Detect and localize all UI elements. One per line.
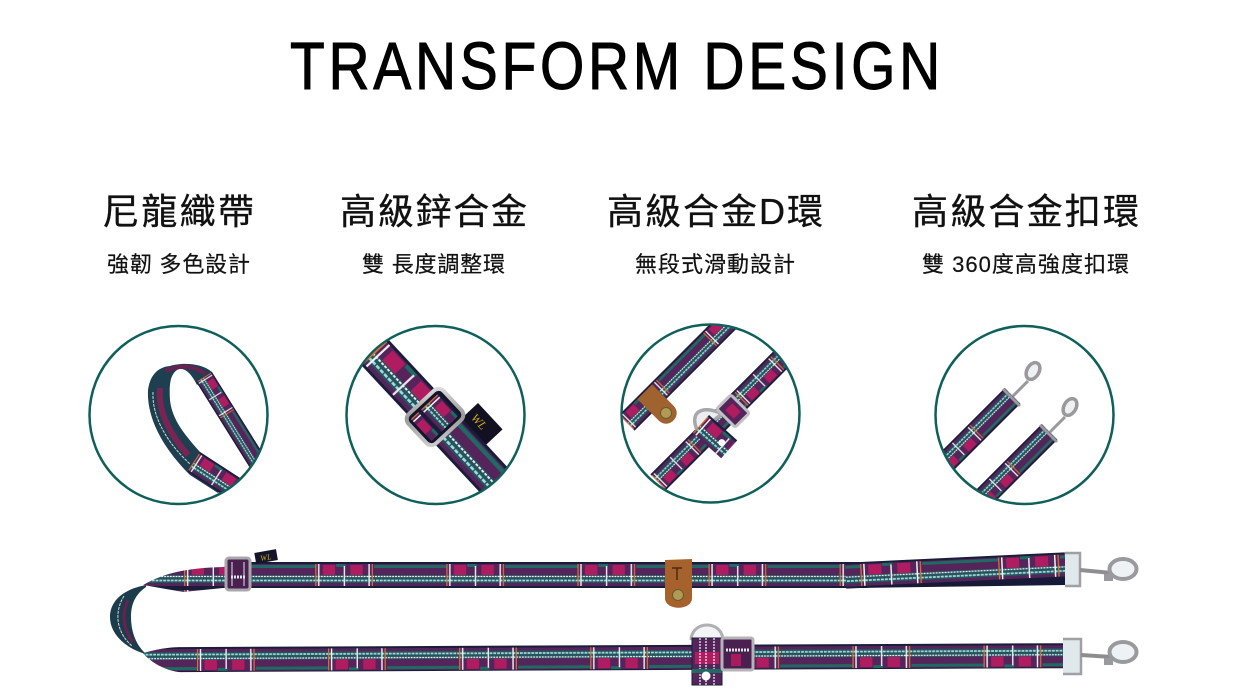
brand tag: WL [260, 552, 273, 563]
subtext: nylon webbing: 強韌 多色設計 [107, 252, 250, 277]
heading: nylon webbing: 尼龍織帶 [103, 191, 254, 232]
subtext: snap hooks: 雙 360度高強度扣環 [922, 252, 1129, 277]
metal slider [404, 386, 466, 448]
brand tag [254, 549, 278, 564]
lower snap hook [1063, 639, 1136, 674]
brand tag: WL [468, 411, 490, 433]
feature column 3: alloy D-ring [607, 191, 823, 502]
folded strap tab [693, 415, 737, 458]
feature column 2: zinc alloy slider [342, 193, 526, 506]
leather tab [638, 384, 677, 424]
brand tag [460, 403, 503, 446]
circle: zinc alloy slider detail [345, 324, 526, 506]
subtext: D-ring: 無段式滑動設計 [635, 252, 795, 277]
heading: D-ring: 高級合金D環 [607, 191, 823, 232]
circle: D-ring detail [620, 323, 801, 504]
left metal slider [226, 558, 250, 590]
metal slider [717, 395, 749, 427]
D-ring and folded tab [691, 625, 723, 685]
leather tab [665, 559, 692, 608]
D-ring [695, 410, 722, 432]
feature column 4: snap hooks [912, 191, 1139, 512]
snap hook A [1003, 360, 1043, 406]
heading: snap hooks: 高級合金扣環 [912, 191, 1139, 232]
lower strap [143, 641, 1063, 672]
circle: webbing loop detail [90, 326, 277, 511]
upper strap [143, 562, 867, 592]
full leash [110, 549, 1136, 685]
circle: snap hooks detail [933, 326, 1114, 512]
subtext: zinc alloy: 雙 長度調整環 [362, 252, 505, 277]
leash loop [110, 585, 146, 654]
lower metal slider [722, 638, 753, 670]
title: TRANSFORM DESIGN [290, 30, 940, 104]
upper snap hook [1065, 553, 1136, 586]
heading: zinc alloy: 高級鋅合金 [340, 191, 527, 232]
snap hook B [1040, 396, 1080, 442]
feature column 1: nylon webbing [90, 191, 277, 511]
